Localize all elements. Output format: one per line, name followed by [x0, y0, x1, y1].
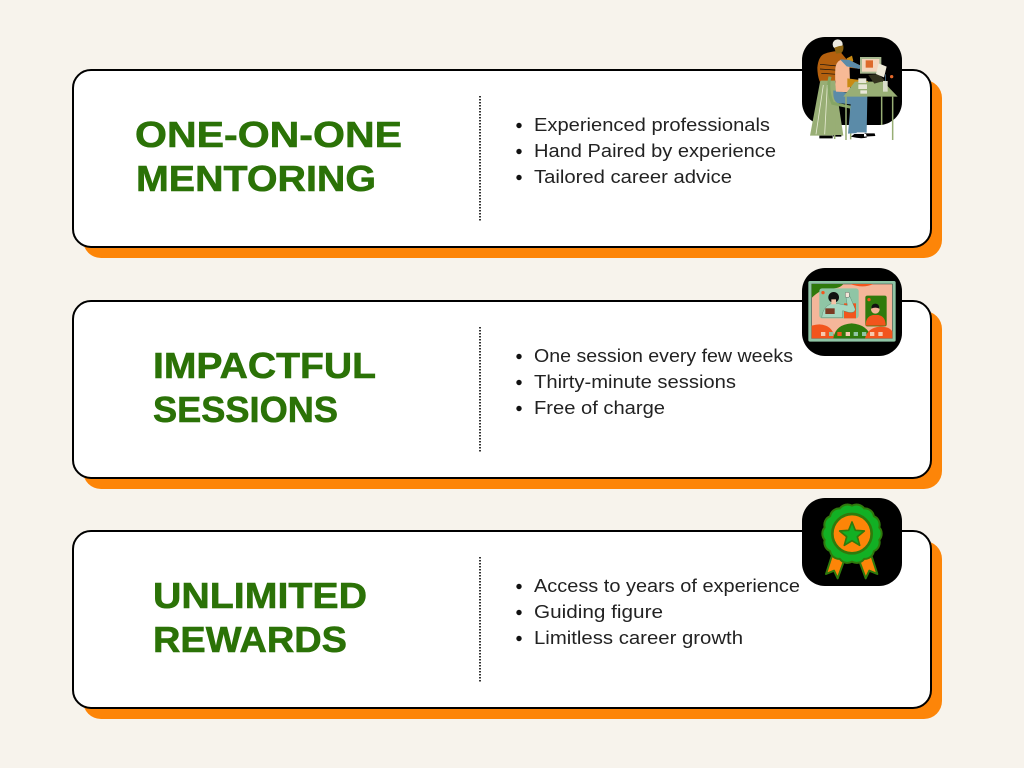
- bullet list: Thirty-minute sessions: [534, 372, 736, 392]
- heading: MENTORING: [136, 158, 376, 199]
- bullet list: Tailored career advice: [534, 167, 732, 187]
- bullet list: Access to years of experience: [534, 576, 800, 596]
- bullet list: Hand Paired by experience: [534, 141, 776, 161]
- white card: [73, 531, 931, 708]
- white card: [73, 301, 931, 478]
- heading: ONE-ON-ONE: [135, 114, 402, 155]
- bullet list: Guiding figure: [534, 602, 663, 622]
- bullet list: Free of charge: [534, 398, 665, 418]
- bullet list: [516, 576, 800, 648]
- orange offset shadow: [83, 541, 942, 719]
- panel: one-on-one mentoring: [73, 37, 942, 258]
- bullet list: [516, 346, 793, 418]
- heading: UNLIMITED: [153, 575, 367, 616]
- orange offset shadow: [83, 311, 942, 489]
- heading: [153, 345, 376, 430]
- heading: [153, 575, 367, 660]
- bullet list: Limitless career growth: [534, 628, 743, 648]
- white card: [73, 70, 931, 247]
- heading: SESSIONS: [153, 389, 338, 430]
- orange offset shadow: [83, 80, 942, 258]
- bullet list: Experienced professionals: [534, 115, 770, 135]
- icon: award rosette: [802, 498, 902, 586]
- panel: unlimited rewards: [73, 498, 942, 719]
- icon: two people at a desk: [802, 37, 902, 140]
- bullet list: [516, 115, 776, 187]
- heading: REWARDS: [153, 619, 347, 660]
- heading: [135, 114, 402, 199]
- icon: video call screen: [802, 268, 902, 356]
- heading: IMPACTFUL: [153, 345, 376, 386]
- panel: impactful sessions: [73, 268, 942, 489]
- bullet list: One session every few weeks: [534, 346, 793, 366]
